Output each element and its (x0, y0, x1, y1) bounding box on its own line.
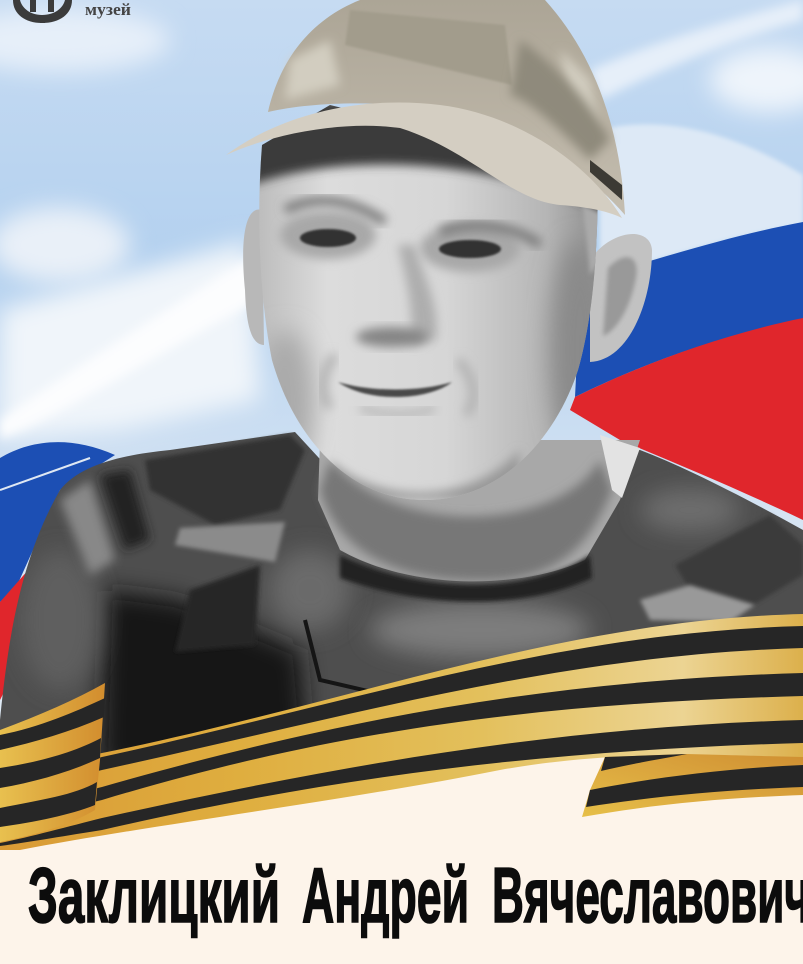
hair at the temple (582, 208, 598, 273)
neck (318, 440, 640, 581)
ribbon: right fold (582, 754, 803, 817)
shoulder straps (145, 435, 305, 525)
mouth (338, 382, 452, 397)
forehead shadow under the cap (260, 105, 598, 213)
eye sockets (280, 211, 376, 259)
cap crown (268, 0, 625, 215)
name heading: Андрей (302, 851, 469, 939)
cap brim (226, 102, 622, 218)
flag: right side (570, 124, 803, 520)
cream footer background (0, 729, 803, 964)
logo: museum emblem (13, 0, 72, 23)
face (259, 105, 598, 500)
name heading: Заклицкий (28, 851, 280, 939)
portrait of the man (0, 0, 803, 770)
eyebrows (285, 201, 385, 222)
smile lines (323, 355, 335, 408)
ribbon: left fold (0, 683, 105, 842)
nose side shadow (398, 245, 437, 345)
logo text: музей (85, 0, 131, 19)
name heading (28, 851, 803, 939)
nose (356, 327, 428, 347)
flag: left side (0, 442, 115, 700)
St George ribbon: main band (0, 614, 803, 850)
shirt (0, 432, 803, 770)
ears (243, 210, 264, 345)
eyes (300, 229, 356, 247)
